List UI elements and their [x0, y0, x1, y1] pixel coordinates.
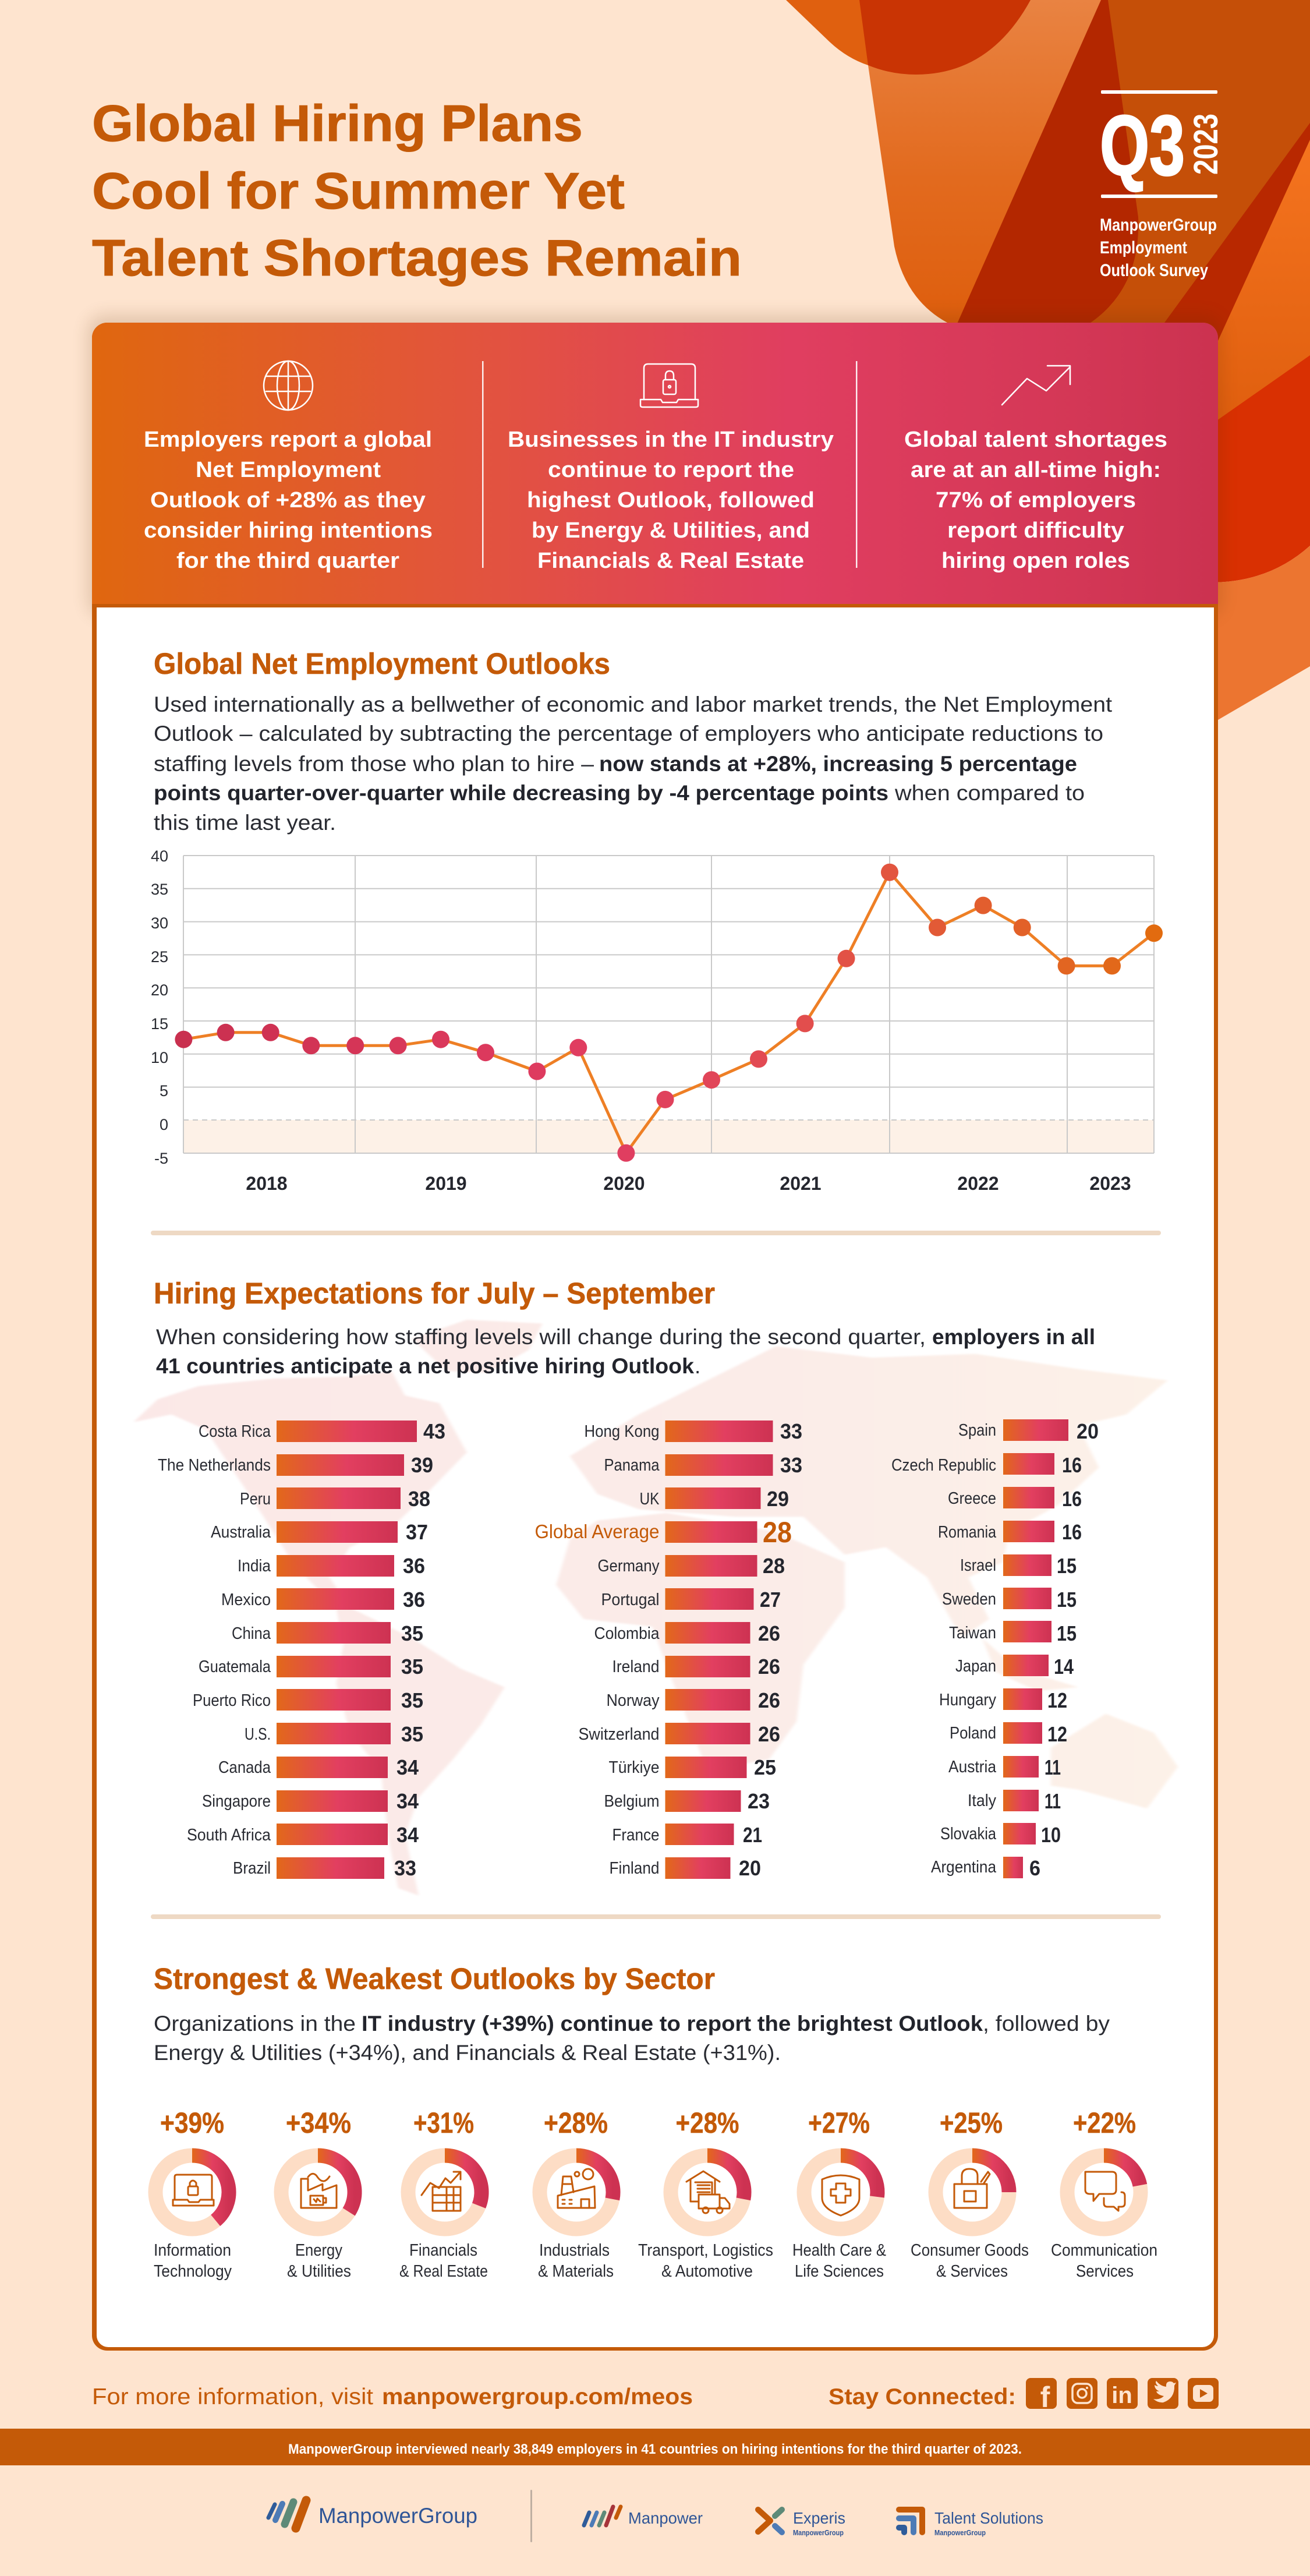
logo: Experis	[758, 2509, 845, 2537]
icon: linkedin: in	[1111, 2383, 1132, 2408]
donut: consumer goods and services: & Services	[936, 2262, 1008, 2281]
title	[92, 94, 742, 287]
bar chart: column 3: 14	[1054, 1655, 1074, 1679]
text block: outlook description: when compared to	[894, 781, 1085, 805]
text block: sector description: Energy & Utilities (+34%), and Financials & Real Estate (+31%).	[154, 2041, 781, 2065]
line chart: net employment outlook 2018-2023	[151, 847, 1163, 1194]
bar chart: column 2: 33	[780, 1419, 802, 1443]
bar chart: column 3: Italy	[968, 1791, 996, 1810]
bar chart: column 2: Türkiye	[609, 1758, 659, 1777]
bar chart: column 1: 43	[423, 1419, 445, 1443]
icon: energy factory	[301, 2174, 337, 2208]
bar chart: column 1: Guatemala	[199, 1658, 271, 1676]
bar chart: column 3: 16	[1062, 1520, 1082, 1544]
quarter badge: Outlook Survey	[1100, 261, 1208, 280]
donut: consumer goods and services: +25%	[940, 2107, 1003, 2139]
bar chart: column 3: Spain	[958, 1421, 996, 1440]
quarter badge: ManpowerGroup	[1100, 215, 1217, 235]
text block: sector description: Organizations in the	[154, 2012, 356, 2036]
text block: sector description: , followed by	[983, 2012, 1110, 2036]
bar chart: column 1: Singapore	[202, 1792, 271, 1811]
bar chart: column 3: 10	[1041, 1823, 1061, 1847]
bar chart: column 2: UK	[639, 1490, 660, 1508]
icon: linkedin	[1107, 2378, 1138, 2409]
footer: more information link: manpowergroup.com/meos	[382, 2384, 693, 2409]
bar chart: column 2: Germany	[597, 1557, 660, 1575]
findings text column 2	[508, 427, 834, 573]
bar chart: column 3: Israel	[960, 1556, 996, 1575]
findings text column 2: highest Outlook, followed	[527, 488, 815, 513]
donut: transport, logistics and automotive: +28%	[675, 2107, 739, 2139]
donut: financials and real estate: & Real Estate	[399, 2262, 488, 2281]
donut: consumer goods and services: Consumer Goods	[911, 2241, 1029, 2260]
bar chart: column 2: 28	[763, 1516, 792, 1549]
bar chart: column 3: 16	[1062, 1487, 1082, 1511]
findings text column 1: for the third quarter	[176, 549, 399, 573]
y axis labels: 40	[151, 847, 168, 865]
donut: financials and real estate: Financials	[409, 2241, 477, 2260]
text block: outlook description: this time last year.	[154, 811, 336, 835]
bar chart: column 2: 20	[739, 1856, 761, 1880]
text block: outlook description: Used internationally as a bellwether of economic and labor market trends, the Net Employment	[154, 692, 1113, 716]
logo: Experis: ManpowerGroup	[793, 2528, 844, 2537]
findings text column 2: Businesses in the IT industry	[508, 427, 834, 452]
world map background	[134, 1320, 1178, 1896]
donut: transport, logistics and automotive: & Automotive	[661, 2262, 753, 2281]
card shadow	[87, 315, 1223, 617]
bar chart: column 3: 11	[1045, 1755, 1061, 1779]
text block: hiring expectations description: employers in all	[932, 1325, 1095, 1349]
logo: Talent Solutions: Talent Solutions	[934, 2509, 1043, 2527]
quarter badge	[1100, 90, 1225, 280]
panel: key findings header	[92, 323, 1218, 604]
bar chart: column 3: 12	[1047, 1688, 1067, 1712]
bar chart: column 3: Greece	[948, 1489, 996, 1508]
bar chart: column 1: The Netherlands	[158, 1456, 271, 1475]
heading: global net employment outlooks: Global Net Employment Outlooks	[154, 647, 610, 680]
bar chart: column 2: 26	[758, 1688, 780, 1712]
x axis year labels: 2018	[246, 1173, 288, 1194]
bar chart: column 1: India	[238, 1557, 271, 1575]
x axis year labels: 2019	[425, 1173, 467, 1194]
donut: communication services: Communication	[1051, 2241, 1157, 2260]
text block: outlook description: Outlook – calculated by subtracting the percentage of employers who anticipate reductions to	[154, 722, 1103, 745]
bar chart: column 1: 33	[394, 1856, 416, 1880]
logo: ManpowerGroup	[268, 2500, 477, 2528]
title: Cool for Summer Yet	[92, 162, 625, 220]
icon: warehouse and truck	[686, 2171, 730, 2213]
footer: more information link: For more information, visit	[92, 2384, 373, 2409]
bar chart: column 1: Puerto Rico	[193, 1691, 271, 1710]
icon: shopping bag	[954, 2169, 990, 2208]
title: Talent Shortages Remain	[92, 229, 742, 287]
bar chart: column 1: 39	[411, 1453, 433, 1477]
footer: stay connected: Stay Connected:	[829, 2384, 1016, 2409]
bar chart: column 2: 25	[754, 1755, 776, 1779]
icon: youtube	[1188, 2378, 1219, 2409]
bar chart: column 3: Austria	[948, 1758, 997, 1776]
bar chart: column 3: 12	[1047, 1722, 1067, 1746]
bar chart: column 2: 27	[760, 1588, 781, 1612]
bar chart: column 3: 20	[1077, 1419, 1099, 1443]
donut: health care and life sciences	[792, 2107, 886, 2281]
donut: energy and utilities	[281, 2107, 355, 2281]
findings text column 3: Global talent shortages	[904, 427, 1167, 452]
icon: laptop with lock	[640, 364, 698, 407]
findings text column 2: by Energy & Utilities, and	[532, 518, 810, 543]
donut: information technology: Information	[154, 2241, 231, 2260]
bar chart: column 3: Romania	[938, 1523, 997, 1542]
text block: outlook description: points quarter-over-quarter while decreasing by -4 percentage points	[154, 781, 888, 805]
x axis year labels: 2023	[1089, 1173, 1131, 1194]
bar chart: column 1: South Africa	[187, 1826, 271, 1844]
bar chart: column 1: 35	[401, 1621, 423, 1645]
bar chart: column 2: Portugal	[601, 1591, 659, 1609]
y axis labels: 10	[151, 1049, 168, 1066]
donut: health care and life sciences: Health Care &	[792, 2241, 886, 2260]
bar chart: column 1: China	[232, 1624, 271, 1643]
bar chart: column 3	[891, 1419, 1099, 1880]
bar chart: column 1: Peru	[240, 1490, 271, 1508]
x axis year labels: 2020	[603, 1173, 645, 1194]
bar chart: column 1: 36	[403, 1588, 425, 1612]
bar chart: column 1: 34	[396, 1789, 419, 1813]
bar chart: column 2: 33	[780, 1453, 802, 1477]
text block: hiring expectations description: .	[695, 1354, 700, 1378]
bar chart: column 1: 34	[396, 1823, 419, 1847]
x axis year labels: 2021	[780, 1173, 822, 1194]
donut: energy and utilities: & Utilities	[287, 2262, 351, 2281]
quarter badge: Employment	[1100, 238, 1187, 257]
bar chart: column 2: Ireland	[612, 1658, 659, 1676]
icon: instagram	[1067, 2378, 1097, 2409]
bar chart: column 1: Costa Rica	[199, 1422, 271, 1441]
x axis year labels: 2022	[957, 1173, 999, 1194]
bar chart: column 2: Hong Kong	[585, 1422, 659, 1441]
icon: twitter	[1148, 2378, 1178, 2409]
donut: communication services: Services	[1076, 2262, 1134, 2281]
donut: communication services	[1051, 2107, 1157, 2281]
donut: information technology: Technology	[154, 2262, 232, 2281]
donut: financials and real estate	[399, 2107, 488, 2281]
bar chart: column 1: Australia	[211, 1523, 271, 1542]
donut: consumer goods and services	[911, 2107, 1029, 2281]
main card	[92, 323, 1218, 2351]
text block: sector description: IT industry (+39%) continue to report the brightest Outlook	[362, 2012, 983, 2036]
findings text column 3	[904, 427, 1167, 573]
logo: Talent Solutions	[899, 2509, 1043, 2537]
y axis labels: 35	[151, 881, 168, 898]
data line	[183, 872, 1154, 1153]
bar chart: column 1: Brazil	[233, 1859, 271, 1878]
donut: industrials and materials	[538, 2107, 614, 2281]
text block: outlook description: staffing levels from those who plan to hire –	[154, 752, 594, 776]
bar chart: column 2: Global Average	[534, 1521, 659, 1542]
bar chart: column 3: Sweden	[942, 1590, 996, 1609]
bar chart: column 3: 6	[1029, 1856, 1040, 1880]
bar chart: column 2: Belgium	[604, 1792, 659, 1811]
donut: energy and utilities: Energy	[295, 2241, 342, 2260]
findings text column 2: continue to report the	[548, 458, 794, 482]
text block: sector description	[154, 2012, 1110, 2065]
donut: energy and utilities: +34%	[286, 2107, 351, 2139]
bar chart: column 3: Czech Republic	[891, 1456, 996, 1475]
bar chart: column 3: 11	[1045, 1789, 1061, 1813]
donut: communication services: +22%	[1073, 2107, 1136, 2139]
donut: industrials and materials: & Materials	[538, 2262, 614, 2281]
bar chart: column 2: Colombia	[594, 1624, 660, 1643]
donut: financials and real estate: +31%	[413, 2107, 474, 2139]
bar chart: column 1: 38	[408, 1487, 430, 1511]
bar chart: column 3: Poland	[950, 1724, 996, 1743]
donut: transport, logistics and automotive	[638, 2107, 773, 2281]
bar chart: column 2: 29	[767, 1487, 789, 1511]
bar chart: column 1: 37	[406, 1520, 428, 1544]
bar chart: column 3: 15	[1057, 1621, 1077, 1645]
findings text column 1	[144, 427, 433, 573]
bar chart: column 2: 21	[743, 1823, 762, 1847]
icon: factory with smoke	[558, 2169, 595, 2208]
bar chart: column 3: Japan	[955, 1657, 996, 1676]
text block: hiring expectations description: 41 countries anticipate a net positive hiring Outlook	[156, 1354, 694, 1378]
y axis labels: 5	[160, 1082, 168, 1100]
icon: medical shield	[822, 2175, 859, 2215]
donut: industrials and materials: +28%	[544, 2107, 608, 2139]
bar chart: column 1: 34	[396, 1755, 419, 1779]
bar chart: column 2: 28	[763, 1554, 785, 1578]
bar chart: column 2: Switzerland	[579, 1725, 659, 1744]
donut: transport, logistics and automotive: Transport, Logistics	[638, 2241, 773, 2260]
logo: Talent Solutions: ManpowerGroup	[934, 2528, 986, 2537]
icon: globe	[264, 361, 313, 410]
bar chart: column 1: Mexico	[221, 1591, 271, 1609]
y axis labels: 30	[151, 914, 168, 932]
bar chart: column 2: Panama	[604, 1456, 660, 1475]
findings text column 3: hiring open roles	[941, 549, 1130, 573]
y axis labels: 25	[151, 948, 168, 966]
bar chart: column 2: 26	[758, 1722, 780, 1746]
logo: Manpower	[584, 2507, 703, 2527]
icon: growth over building	[422, 2172, 461, 2211]
findings text column 3: 77% of employers	[936, 488, 1136, 513]
bar chart: column 1: U.S.	[245, 1725, 271, 1744]
bar chart: column 3: Taiwan	[949, 1624, 996, 1642]
bar chart: column 2	[534, 1419, 802, 1880]
donut: industrials and materials: Industrials	[539, 2241, 610, 2260]
y axis labels: -5	[154, 1150, 168, 1167]
icon: facebook: f	[1040, 2381, 1050, 2414]
findings text column 1: consider hiring intentions	[144, 518, 433, 543]
bar chart: column 3: Argentina	[931, 1858, 997, 1877]
bar chart: column 2: France	[612, 1826, 659, 1844]
bar chart: column 1: 35	[401, 1655, 423, 1679]
bar chart: column 2: Finland	[609, 1859, 659, 1878]
bar chart: column 3: Hungary	[939, 1691, 996, 1709]
text block: hiring expectations description	[156, 1325, 1095, 1378]
findings text column 2: Financials & Real Estate	[537, 549, 804, 573]
icon: rising trend arrow	[1002, 366, 1070, 405]
findings text column 3: are at an all-time high:	[911, 458, 1161, 482]
heading: hiring expectations: Hiring Expectations for July – September	[154, 1277, 715, 1310]
quarter badge: Q3	[1100, 98, 1185, 193]
bar chart: column 1: 35	[401, 1688, 423, 1712]
bar chart: column 1	[158, 1419, 445, 1880]
logo: Experis: Experis	[793, 2509, 845, 2527]
x axis year labels	[246, 1173, 1131, 1194]
bar chart: column 1: 36	[403, 1554, 425, 1578]
bar chart: column 3: 15	[1057, 1588, 1077, 1612]
y axis labels: 0	[160, 1116, 168, 1133]
text block: hiring expectations description: When considering how staffing levels will change during the second quarter,	[156, 1325, 926, 1349]
bar chart: column 2: 26	[758, 1621, 780, 1645]
text block: outlook description	[154, 692, 1113, 835]
bar chart: column 2: 26	[758, 1655, 780, 1679]
bar chart: column 1: Canada	[218, 1758, 271, 1777]
donut: information technology	[154, 2107, 232, 2281]
donut: information technology: +39%	[160, 2107, 224, 2139]
findings text column 1: Outlook of +28% as they	[150, 488, 426, 513]
icon: facebook	[1026, 2378, 1057, 2414]
text block: outlook description: now stands at +28%, increasing 5 percentage	[599, 752, 1077, 776]
donut: health care and life sciences: Life Sciences	[795, 2262, 884, 2281]
y axis labels: 20	[151, 981, 168, 999]
logo: Manpower: Manpower	[628, 2509, 703, 2527]
bar chart: column 2: 23	[748, 1789, 770, 1813]
title: Global Hiring Plans	[92, 94, 583, 152]
y axis labels	[151, 847, 168, 1167]
quarter badge: 2023	[1187, 114, 1225, 175]
footer band: survey note: ManpowerGroup interviewed nearly 38,849 employers in 41 countries on hiring intentions for the third quarter of 2023.	[288, 2441, 1022, 2457]
data points	[175, 864, 1163, 1162]
footer: more information link	[92, 2384, 693, 2409]
findings text column 1: Net Employment	[196, 458, 381, 482]
bar chart: column 2: Norway	[607, 1691, 660, 1710]
donut: health care and life sciences: +27%	[808, 2107, 870, 2139]
logo: ManpowerGroup: ManpowerGroup	[318, 2504, 477, 2528]
bar chart: column 3: 16	[1062, 1453, 1082, 1477]
findings text column 3: report difficulty	[947, 518, 1124, 543]
y axis labels: 15	[151, 1015, 168, 1033]
footer band: survey note	[0, 2429, 1310, 2465]
icon: speech bubbles	[1085, 2172, 1125, 2211]
icon: laptop	[173, 2175, 214, 2206]
heading: sector outlooks: Strongest & Weakest Outlooks by Sector	[154, 1962, 715, 1995]
bar chart: column 3: 15	[1057, 1554, 1077, 1578]
bar chart: column 1: 35	[401, 1722, 423, 1746]
bar chart: column 3: Slovakia	[940, 1825, 997, 1843]
findings text column 1: Employers report a global	[144, 427, 432, 452]
decorative abstract orange shapes	[786, 0, 1310, 724]
